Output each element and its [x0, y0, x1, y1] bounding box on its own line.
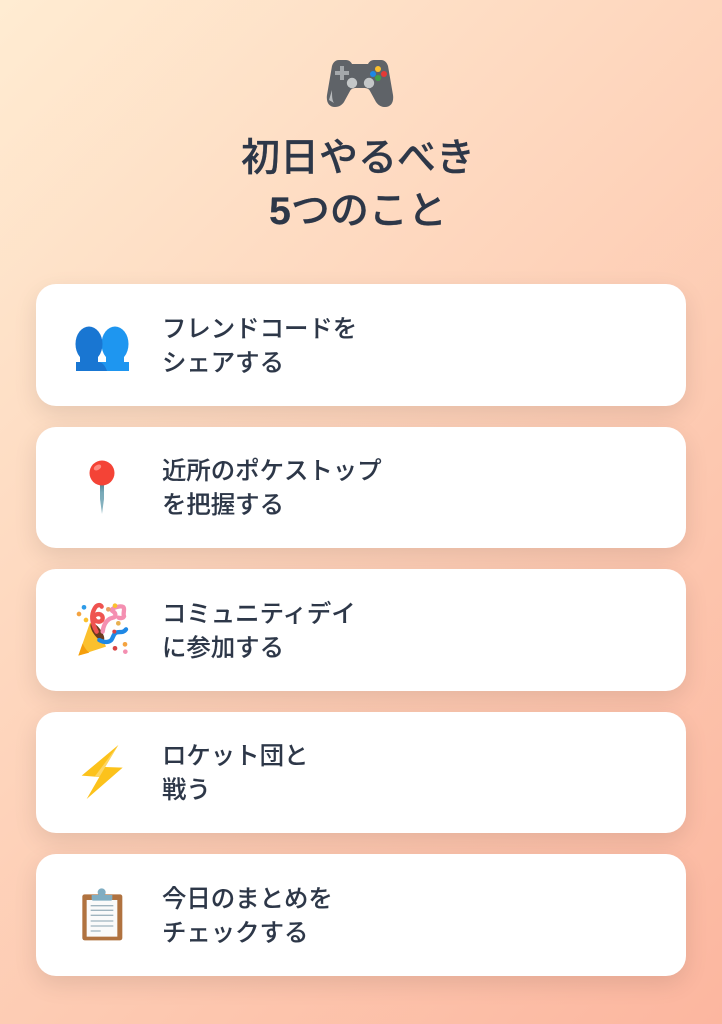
- icon: people: [76, 326, 129, 371]
- panel: pokestops: [36, 426, 686, 548]
- text: 近所のポケストップ: [162, 458, 382, 485]
- text: ロケット団と: [162, 743, 308, 770]
- icon: clipboard: [82, 888, 122, 940]
- text: [162, 743, 308, 804]
- text: [162, 886, 333, 946]
- icon: pin: [90, 460, 114, 514]
- panel: team rocket: [36, 712, 686, 833]
- panel: friend code: [36, 284, 686, 406]
- text: [162, 600, 356, 662]
- text: コミュニティデイ: [162, 600, 356, 628]
- icon: lightning: [82, 745, 123, 799]
- text: 今日のまとめを: [162, 886, 333, 912]
- text: フレンドコードを: [162, 316, 357, 342]
- text: 戦う: [162, 777, 211, 804]
- icon: game controller: [326, 60, 394, 107]
- panel: daily summary: [36, 854, 686, 976]
- title: [241, 137, 475, 233]
- text: に参加する: [162, 634, 284, 662]
- text: [162, 316, 357, 376]
- icon: party popper: [76, 602, 128, 656]
- title: 初日やるべき: [241, 137, 475, 180]
- panel: community day: [36, 569, 686, 690]
- text: を把握する: [162, 492, 284, 519]
- title: 5つのこと: [269, 190, 447, 233]
- text: [162, 458, 382, 519]
- text: シェアする: [162, 350, 284, 376]
- text: チェックする: [162, 920, 308, 946]
